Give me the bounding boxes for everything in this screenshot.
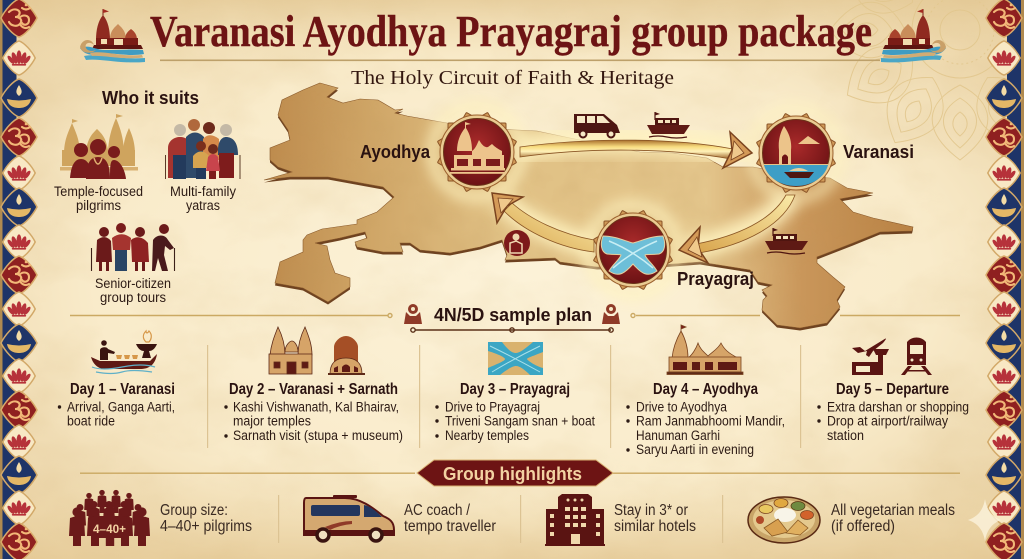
panel: day 3 <box>435 342 595 443</box>
panel: day 4 <box>626 325 785 457</box>
panel: who it suits <box>54 88 240 305</box>
icon: Ram Mandir windows <box>673 362 737 370</box>
list: day 1: boat ride <box>67 414 115 428</box>
section rule: sample plan <box>70 314 960 332</box>
arrow: Prayagraj to Ayodhya <box>492 193 594 252</box>
text: hotels <box>614 502 696 535</box>
text: meals: All vegetarian meals <box>831 502 955 519</box>
label: multi-family yatras: yatras <box>186 198 220 213</box>
panel: group size <box>69 490 252 546</box>
list: day 2: Kashi Vishwanath, Kal Bhairav, <box>233 400 399 414</box>
text: hotels: Stay in 3* or <box>614 502 688 519</box>
icon: train <box>901 338 932 375</box>
icon: Kashi temple <box>269 327 312 374</box>
label: senior-citizen group tours: Senior-citizen <box>95 276 171 291</box>
icon: plane and airport <box>852 339 889 375</box>
icon: crowd of pilgrims <box>69 490 150 546</box>
mandala watermark <box>830 0 1024 160</box>
section rule: group highlights <box>80 472 960 474</box>
label: senior-citizen group tours <box>95 276 171 305</box>
label: multi-family yatras: Multi-family <box>170 184 236 199</box>
list: day 2 <box>224 400 403 443</box>
label: senior-citizen group tours: group tours <box>100 290 166 305</box>
icon: crowd of pilgrims: 4–40+ <box>93 522 126 536</box>
banner: group highlights <box>417 460 613 486</box>
icon: Ram Mandir <box>667 325 743 374</box>
list: day 4: Hanuman Garhi <box>636 428 720 443</box>
icon: Triveni Sangam confluence <box>488 342 543 375</box>
list: day 5: Extra darshan or shopping <box>827 400 969 414</box>
label: temple-focused pilgrims: Temple-focused <box>54 184 143 199</box>
list: day 1 <box>58 400 175 428</box>
icon: temple-focused pilgrims <box>60 114 138 179</box>
left ornamental border <box>0 0 37 559</box>
panel: day 1 <box>58 331 175 428</box>
list: day 4: Ram Janmabhoomi Mandir, <box>636 414 785 428</box>
arrow: Varanasi to Prayagraj <box>679 195 795 263</box>
list: day 3: Drive to Prayagraj <box>445 400 540 414</box>
list: day 4: Saryu Aarti in evening <box>636 442 754 457</box>
icon: temple on river, left <box>80 9 145 62</box>
text: transport: tempo traveller <box>404 518 496 535</box>
medallion: Ayodhya <box>437 112 517 192</box>
panel: transport <box>304 495 496 541</box>
label: temple-focused pilgrims: pilgrims <box>76 198 121 213</box>
text: transport <box>404 502 496 535</box>
list: day 3: Nearby temples <box>445 428 529 443</box>
title rule <box>160 60 880 61</box>
list: day 5 <box>817 400 969 443</box>
icon: boat on route <box>647 112 690 138</box>
panel: day 5 <box>817 338 969 443</box>
icon: aarti boat <box>91 331 157 374</box>
list: day 3 <box>435 400 595 443</box>
panel: meals <box>748 497 955 543</box>
panel: hotels <box>545 494 696 546</box>
text: group size: Group size: <box>160 502 228 519</box>
list: day 4 <box>626 400 785 457</box>
icon: map pin right <box>602 304 620 324</box>
label: temple-focused pilgrims <box>54 184 143 213</box>
list: day 2: major temples <box>233 414 311 428</box>
icon: multi-family group <box>166 119 240 179</box>
heading: who it suits: Who it suits <box>102 88 199 108</box>
map of the holy circuit <box>264 83 914 330</box>
heading: day 3: Day 3 – Prayagraj <box>460 381 570 398</box>
list: day 1: Arrival, Ganga Aarti, <box>67 400 175 414</box>
medallion: Varanasi <box>756 113 836 193</box>
title: Varanasi Ayodhya Prayagraj group package <box>150 7 872 56</box>
text: meals: (if offered) <box>831 518 895 535</box>
divider marks <box>278 495 723 543</box>
label: Prayagraj: Prayagraj <box>677 269 754 289</box>
label: Varanasi: Varanasi <box>843 142 914 162</box>
icon: senior citizens <box>92 223 174 271</box>
text: hotels: similar hotels <box>614 518 696 535</box>
icon: temple on river, right <box>881 9 946 62</box>
map land <box>264 83 913 328</box>
heading: day 2: Day 2 – Varanasi + Sarnath <box>229 381 398 398</box>
arrow: Ayodhya to Varanasi <box>520 132 752 168</box>
heading: day 4: Day 4 – Ayodhya <box>653 381 758 398</box>
map texture <box>264 83 913 328</box>
icon: pilgrim badge <box>504 230 530 256</box>
icon: boat on Ganga <box>765 228 808 254</box>
list: day 3: Triveni Sangam snan + boat <box>445 414 595 428</box>
icon: van <box>574 114 620 138</box>
text: group size <box>160 502 252 535</box>
text: meals <box>831 502 955 535</box>
map land shadow <box>264 86 913 330</box>
heading: day 5: Day 5 – Departure <box>836 381 949 398</box>
banner: group highlights: Group highlights <box>443 464 582 484</box>
text: group size: 4–40+ pilgrims <box>160 518 252 535</box>
text: transport: AC coach / <box>404 502 471 519</box>
icon: tempo traveller van <box>304 495 394 541</box>
icon: Sarnath stupa <box>328 336 365 375</box>
panel: day 2 <box>224 327 403 443</box>
label: multi-family yatras <box>170 184 236 213</box>
icon: map pin left <box>404 304 422 324</box>
medallion: Prayagraj <box>593 210 673 290</box>
list: day 4: Drive to Ayodhya <box>636 400 727 414</box>
list: day 5: Drop at airport/railway <box>827 414 948 428</box>
right ornamental border <box>986 0 1024 559</box>
panel: day dividers <box>207 345 801 448</box>
label: Ayodhya: Ayodhya <box>360 142 431 162</box>
route glow <box>432 107 841 295</box>
heading: 4N/5D sample plan: 4N/5D sample plan <box>434 305 592 325</box>
icon: hotel building <box>545 494 605 546</box>
icon: sparkle <box>968 499 1001 541</box>
heading: day 1: Day 1 – Varanasi <box>70 381 175 398</box>
subtitle: The Holy Circuit of Faith & Heritage <box>351 67 674 89</box>
list: day 2: Sarnath visit (stupa + museum) <box>233 428 403 443</box>
list: day 5: station <box>827 428 864 443</box>
icon: vegetarian thali <box>748 497 820 543</box>
